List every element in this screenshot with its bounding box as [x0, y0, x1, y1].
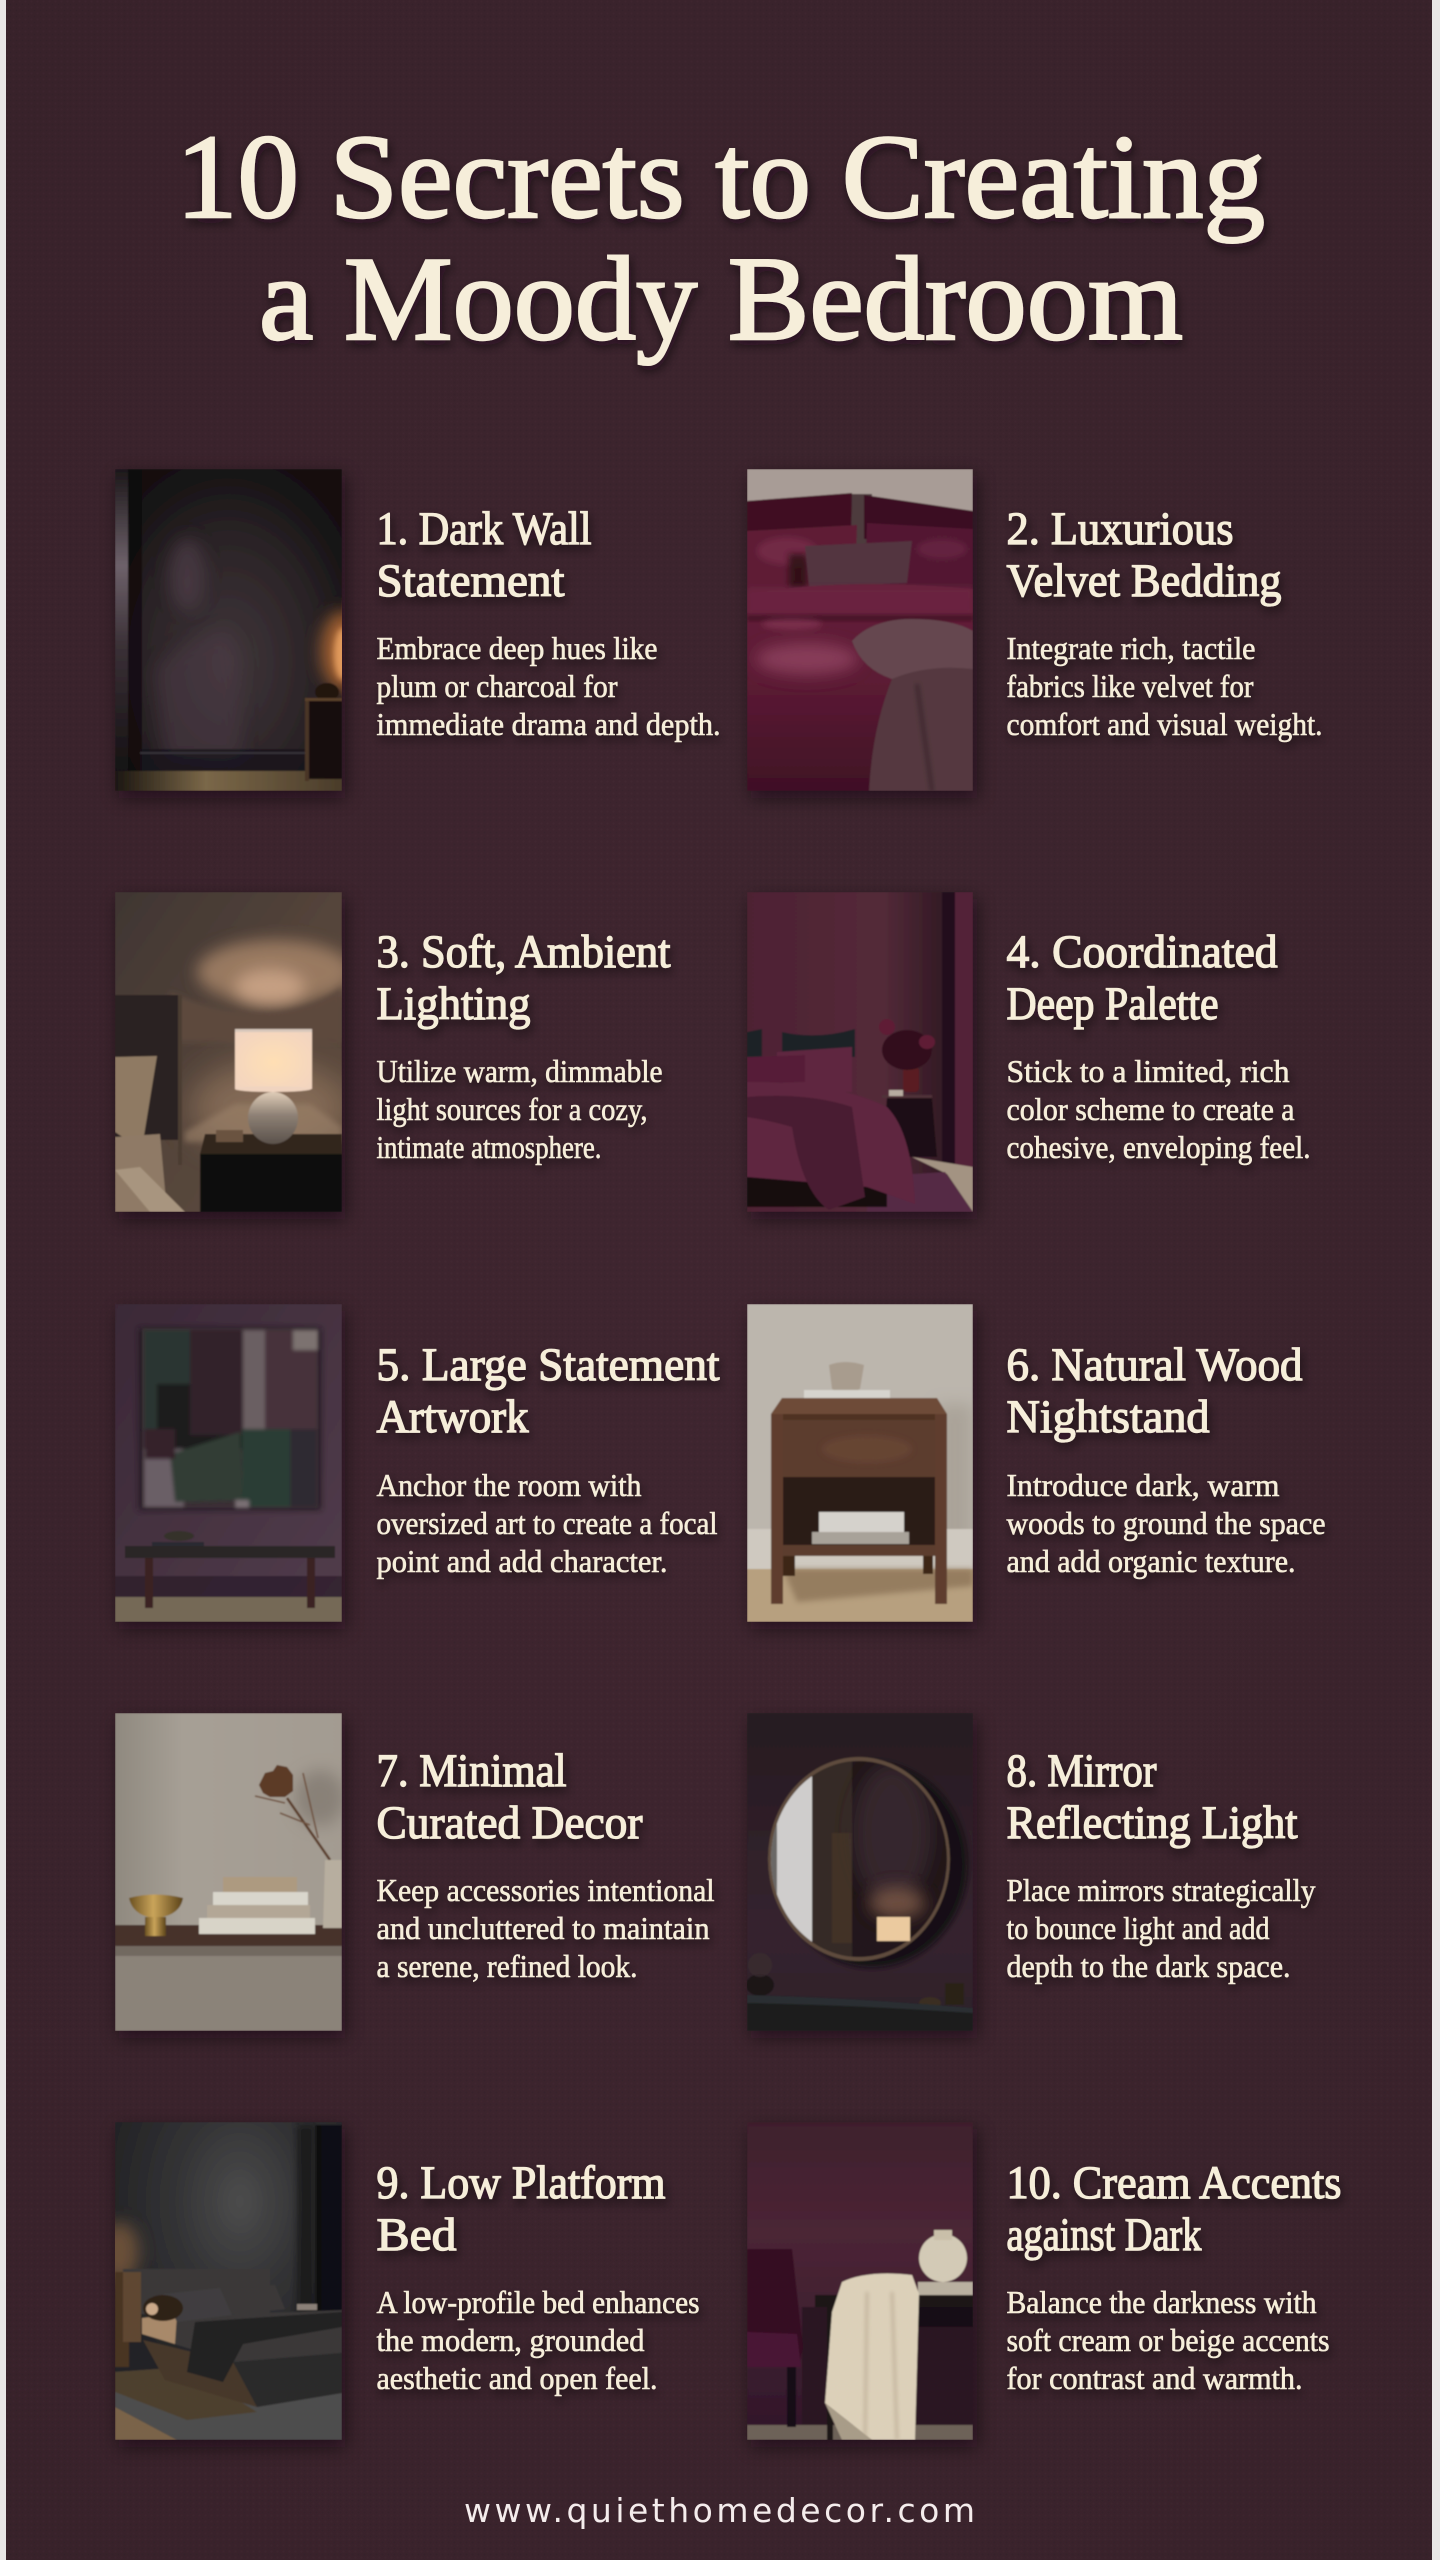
heading	[376, 1745, 643, 1849]
description: intimate atmosphere.	[376, 1129, 602, 1165]
description: fabrics like velvet for	[1006, 668, 1254, 704]
heading: 3. Soft, Ambient	[376, 926, 670, 978]
heading	[376, 926, 670, 1030]
heading: Bed	[376, 2209, 456, 2261]
image: wood nightstand	[747, 1304, 973, 1622]
description: light sources for a cozy,	[376, 1091, 648, 1127]
description: Keep accessories intentional	[376, 1872, 715, 1908]
heading: 10. Cream Accents	[1006, 2157, 1342, 2209]
description: color scheme to create a	[1006, 1091, 1294, 1127]
heading: Velvet Bedding	[1006, 555, 1282, 607]
heading: Reflecting Light	[1006, 1797, 1298, 1849]
title: a Moody Bedroom	[259, 232, 1183, 365]
description	[376, 1872, 715, 1984]
description: Embrace deep hues like	[376, 630, 658, 666]
heading: 4. Coordinated	[1006, 926, 1278, 978]
panel: tip 9 low platform bed	[99, 2122, 700, 2447]
heading: Curated Decor	[376, 1797, 643, 1849]
panel: tip 1 dark wall statement	[115, 469, 720, 798]
heading: against Dark	[1006, 2209, 1202, 2261]
panel: tip 7 minimal curated decor	[115, 1713, 715, 2038]
heading	[1006, 2157, 1342, 2261]
heading: Deep Palette	[1006, 978, 1218, 1030]
description: depth to the dark space.	[1006, 1948, 1290, 1984]
heading	[376, 1339, 720, 1443]
description: a serene, refined look.	[376, 1948, 638, 1984]
description: plum or charcoal for	[376, 668, 618, 704]
description: woods to ground the space	[1006, 1505, 1326, 1541]
description	[376, 630, 720, 742]
heading: Artwork	[376, 1391, 529, 1443]
image: low platform bed	[115, 2122, 342, 2440]
description: Anchor the room with	[376, 1467, 642, 1503]
description: oversized art to create a focal	[376, 1505, 718, 1541]
heading: Statement	[376, 555, 564, 607]
heading	[1006, 503, 1282, 607]
image: dark wall	[115, 469, 342, 791]
heading: 5. Large Statement	[376, 1339, 720, 1391]
panel: tip 3 soft ambient lighting	[115, 892, 670, 1219]
image: plum bedroom	[747, 892, 973, 1212]
panel: tip 6 natural wood nightstand	[747, 1304, 1326, 1629]
description	[1006, 1467, 1326, 1579]
description	[376, 1467, 718, 1579]
description: immediate drama and depth.	[376, 706, 720, 742]
description: Utilize warm, dimmable	[376, 1053, 662, 1089]
description	[1006, 1053, 1310, 1165]
description: to bounce light and add	[1006, 1910, 1270, 1946]
description: and uncluttered to maintain	[376, 1910, 710, 1946]
image: shelf with books	[115, 1713, 342, 2031]
panel: tip 2 luxurious velvet bedding	[747, 469, 1322, 798]
panel: tip 8 mirror reflecting light	[746, 1713, 1316, 2038]
description: point and add character.	[376, 1543, 668, 1579]
heading	[376, 2157, 666, 2261]
heading: 2. Luxurious	[1006, 503, 1234, 555]
description: aesthetic and open feel.	[376, 2360, 658, 2396]
description	[1006, 1872, 1316, 1984]
description: A low-profile bed enhances	[376, 2284, 700, 2320]
description	[376, 1053, 662, 1165]
heading	[1006, 926, 1278, 1030]
description: Integrate rich, tactile	[1006, 630, 1256, 666]
description: Introduce dark, warm	[1006, 1467, 1280, 1503]
description: comfort and visual weight.	[1006, 706, 1322, 742]
heading: 9. Low Platform	[376, 2157, 666, 2209]
description: the modern, grounded	[376, 2322, 644, 2358]
image: velvet bed	[747, 469, 973, 791]
heading	[376, 503, 592, 607]
description	[1006, 630, 1322, 742]
heading	[1006, 1745, 1298, 1849]
description: Balance the darkness with	[1006, 2284, 1316, 2320]
description: and add organic texture.	[1006, 1543, 1296, 1579]
description	[376, 2284, 700, 2396]
description	[1006, 2284, 1330, 2396]
heading: 1. Dark Wall	[376, 503, 592, 555]
description: Place mirrors strategically	[1006, 1872, 1316, 1908]
title: 10 Secrets to Creating	[176, 110, 1265, 243]
heading: Lighting	[376, 978, 530, 1030]
heading	[1006, 1339, 1302, 1443]
description: soft cream or beige accents	[1006, 2322, 1330, 2358]
heading: Nightstand	[1006, 1391, 1210, 1443]
image: bedside lamp	[115, 892, 342, 1212]
panel: tip 10 cream accents against dark	[747, 2122, 1342, 2447]
footer website: www.quiethomedecor.com	[464, 2491, 975, 2530]
description: cohesive, enveloping feel.	[1006, 1129, 1310, 1165]
image: round mirror	[747, 1713, 973, 2031]
heading: 6. Natural Wood	[1006, 1339, 1302, 1391]
panel: tip 4 coordinated deep palette	[747, 892, 1310, 1219]
description: Stick to a limited, rich	[1006, 1053, 1290, 1089]
heading: 7. Minimal	[376, 1745, 566, 1797]
panel: tip 5 large statement artwork	[115, 1304, 720, 1629]
description: for contrast and warmth.	[1006, 2360, 1302, 2396]
title	[176, 110, 1265, 365]
image: abstract artwork	[115, 1304, 342, 1622]
image: cream throw and vase	[747, 2122, 973, 2440]
heading: 8. Mirror	[1006, 1745, 1157, 1797]
